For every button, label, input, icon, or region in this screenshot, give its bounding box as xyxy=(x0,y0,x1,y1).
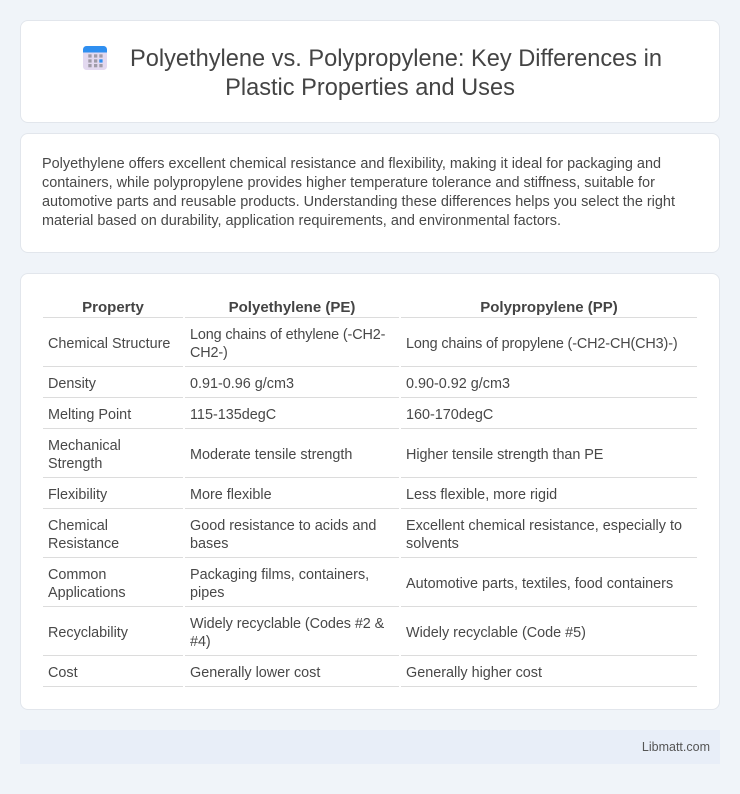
row: mechanical strength xyxy=(48,438,121,472)
row: common applications: Applications xyxy=(48,585,126,601)
row: flexibility: Flexibility xyxy=(48,487,107,503)
text: Higher tensile strength than PE xyxy=(406,447,603,463)
intro text xyxy=(42,156,675,229)
row: density: Density xyxy=(48,376,96,392)
text: Long chains of propylene (-CH2-CH(CH3)-) xyxy=(406,336,678,352)
row: chemical resistance xyxy=(48,518,119,552)
text: More flexible xyxy=(190,487,272,503)
text: Less flexible, more rigid xyxy=(406,487,557,503)
text: 160-170degC xyxy=(406,407,493,423)
text: Widely recyclable (Codes #2 & xyxy=(190,616,384,632)
header: property: Property xyxy=(82,299,144,316)
row: melting point: Melting Point xyxy=(48,407,131,423)
panel: title card xyxy=(20,20,720,123)
text: pipes xyxy=(190,585,224,601)
header: polypropylene: Polypropylene (PP) xyxy=(480,299,618,316)
row: common applications: Common xyxy=(48,567,106,583)
footer bar xyxy=(20,730,720,764)
header: polyethylene: Polyethylene (PE) xyxy=(229,299,355,316)
panel: intro card xyxy=(20,133,720,253)
text: Excellent chemical resistance, especially to xyxy=(406,518,682,534)
text: Packaging films, containers, xyxy=(190,567,369,583)
text: Moderate tensile strength xyxy=(190,447,352,463)
text: Automotive parts, textiles, food containers xyxy=(406,576,673,592)
icon: calendar grid xyxy=(83,46,107,70)
intro text: Polyethylene offers excellent chemical resistance and flexibility, making it ideal for packaging and xyxy=(42,156,661,172)
intro text: containers, while polypropylene provides higher temperature tolerance and stiffness, suitable for xyxy=(42,175,655,191)
row: mechanical strength: Strength xyxy=(48,456,102,472)
footer credit: Libmatt.com xyxy=(642,740,710,754)
text: Widely recyclable (Code #5) xyxy=(406,625,586,641)
intro text: material based on durability, application requirements, and environmental factors. xyxy=(42,213,561,229)
text: 0.91-0.96 g/cm3 xyxy=(190,376,294,392)
title second line: Plastic Properties and Uses xyxy=(225,75,515,101)
row: common applications xyxy=(48,567,126,601)
title: Polyethylene vs. Polypropylene: Key Differences in xyxy=(130,46,662,72)
text: CH2-) xyxy=(190,345,228,361)
text: 0.90-0.92 g/cm3 xyxy=(406,376,510,392)
row: recyclability: Recyclability xyxy=(48,625,128,641)
text: #4) xyxy=(190,634,211,650)
row: chemical resistance: Chemical xyxy=(48,518,108,534)
text: Long chains of ethylene (-CH2- xyxy=(190,327,385,343)
text: Generally lower cost xyxy=(190,665,320,681)
text: Generally higher cost xyxy=(406,665,542,681)
text: Good resistance to acids and xyxy=(190,518,376,534)
row: chemical resistance: Resistance xyxy=(48,536,119,552)
text: bases xyxy=(190,536,228,552)
text: 115-135degC xyxy=(190,407,276,423)
row: chemical structure: Chemical Structure xyxy=(48,336,170,352)
row: mechanical strength: Mechanical xyxy=(48,438,121,454)
intro text: automotive parts and reusable products. Understanding these differences helps you select the right xyxy=(42,194,675,210)
row: cost: Cost xyxy=(48,665,78,681)
text: solvents xyxy=(406,536,459,552)
panel: comparison table card xyxy=(20,273,720,710)
